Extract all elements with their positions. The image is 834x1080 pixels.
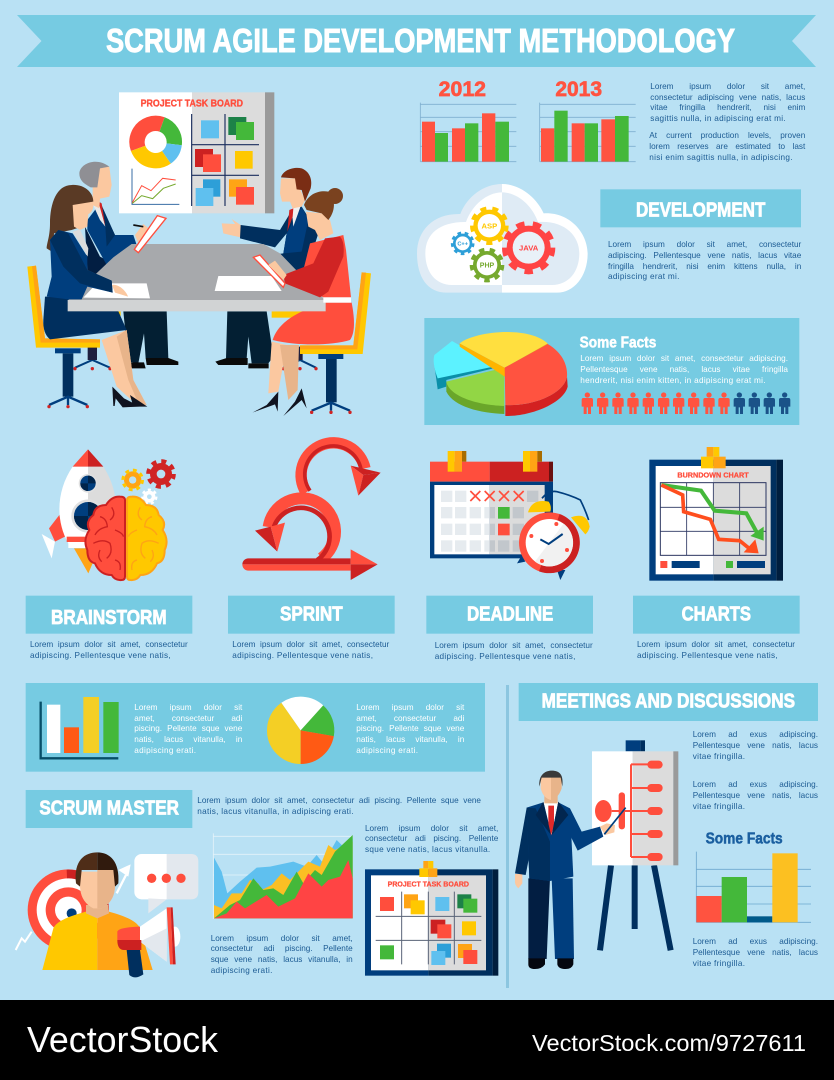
text: strip paragraph left: natis, lacus vitanulla, in	[134, 735, 242, 744]
text: development paragraph: adipiscing. Pellentesque vene natis, lacus vitae	[608, 251, 801, 260]
text: area chart paragraph: adipiscing erati.	[211, 966, 273, 975]
text: production levels paragraph: At current production levels, proven	[649, 131, 805, 140]
right chair	[300, 272, 371, 414]
panel: CHARTS heading: CHARTS	[682, 602, 751, 625]
person: left woman, upper body	[47, 185, 166, 299]
panel: SCRUM MASTER heading	[26, 790, 192, 828]
project task board	[119, 92, 274, 213]
text: meetings paragraph one: Lorem ad exus adipiscing.	[693, 730, 818, 739]
text: some facts paragraph: Pellentesque vene natis, lacus vitae fringilla	[580, 365, 788, 374]
text: meetings paragraph two: Lorem ad exus adipiscing.	[693, 780, 818, 789]
divider between sections	[506, 685, 509, 988]
text: meetings paragraph two: Pellentesque vene natis, lacus	[693, 791, 818, 800]
bar chart: 2012	[420, 77, 516, 162]
text: area chart paragraph: Lorem ipsum dolor sit amet,	[211, 934, 353, 943]
text: strip paragraph left: Lorem ipsum dolor sit	[134, 703, 242, 712]
text: strip paragraph left: piscing. Pellente sque vene	[134, 724, 242, 733]
panel: DEVELOPMENT heading	[600, 189, 801, 227]
text: deadline caption	[435, 641, 593, 661]
person: left woman, skirt and legs	[43, 297, 147, 407]
bar chart: meetings some facts	[696, 831, 811, 922]
text: strip paragraph right: natis, lacus vitanulla, in	[356, 735, 464, 744]
icon: rocket with brain and gears	[42, 449, 174, 580]
text: production levels paragraph	[649, 131, 806, 162]
illustration: team meeting around table with task board	[27, 92, 371, 416]
panel: SPRINT heading	[228, 596, 395, 634]
text: brainstorm caption: Lorem ipsum dolor sit amet, consectetur	[30, 640, 188, 649]
gear: JAVA	[505, 224, 552, 271]
illustration: presenter with flip chart easel	[515, 740, 678, 969]
project task board: PROJECT TASK BOARD	[141, 99, 243, 110]
text: strip paragraph right: adipiscing erati.	[356, 746, 418, 755]
panel: SPRINT heading: SPRINT	[280, 602, 343, 625]
gear: ASP	[472, 209, 506, 243]
icon: sprint loop arrows	[242, 443, 381, 580]
text: production levels paragraph: nisi enim sagittis nulla, in adipiscing.	[649, 153, 793, 162]
bar chart: 2013	[540, 77, 636, 162]
panel: some facts with 3D pie and people	[424, 318, 799, 425]
brain right half	[127, 497, 167, 580]
text: meetings paragraph three: Pellentesque vene natis, lacus	[693, 948, 818, 957]
pie chart	[277, 707, 324, 754]
panel: DEVELOPMENT heading: DEVELOPMENT	[636, 199, 766, 222]
back chairs	[73, 311, 318, 370]
text: intro paragraph: sagittis nulla, in adipiscing erat mi.	[650, 114, 786, 123]
gear: PHP	[472, 250, 502, 280]
text: meetings paragraph one: Pellentesque vene natis, lacus	[693, 741, 818, 750]
text: strip paragraph right: piscing. Pellente sque vene	[356, 724, 464, 733]
text: board paragraph	[365, 824, 498, 854]
meeting table	[68, 244, 326, 311]
text: intro paragraph: consectetur adipiscing vene natis, lacus	[650, 93, 805, 102]
presenter	[515, 771, 626, 969]
text: production levels paragraph: lorem reserves are estimated to last	[649, 142, 805, 151]
panel: some facts with 3D pie and people: Some Facts	[580, 334, 656, 351]
text: sprint caption: adipiscing. Pellentesque vene natis,	[232, 651, 373, 660]
area chart	[213, 833, 353, 919]
text: brainstorm caption: adipiscing. Pellentesque vene natis,	[30, 651, 171, 660]
icon: burndown chart board	[649, 447, 783, 581]
brain left half	[85, 497, 125, 580]
text: charts caption: adipiscing. Pellentesque vene natis,	[637, 651, 778, 660]
panel: SCRUM MASTER heading: SCRUM MASTER	[39, 797, 179, 820]
easel with mind map	[592, 740, 678, 950]
icon: cloud with technology gears	[417, 184, 588, 293]
text: development paragraph: fringilla hendrerit, nisi enim kittens nulla, in	[608, 262, 801, 271]
bar chart: meetings some facts: Some Facts	[706, 831, 783, 848]
text: intro paragraph: vitae fringilla hendrerit, nisi enim	[650, 103, 805, 112]
illustration: scrum master with megaphone and target	[16, 852, 198, 977]
text: some facts paragraph: Lorem ipsum dolor sit amet, consectetur adipiscing.	[580, 354, 788, 363]
text: scrum master intro	[197, 796, 481, 816]
footer bar: VectorStock	[27, 1019, 219, 1060]
text: some facts paragraph: hendrerit, nisi enim kitten, in adipiscing erat mi.	[580, 376, 766, 385]
text: intro paragraph: Lorem ipsum dolor sit amet,	[650, 82, 805, 91]
text: some facts paragraph	[580, 354, 788, 385]
text: meetings paragraph three	[692, 937, 818, 968]
panel: DEADLINE heading	[426, 596, 593, 634]
icon: burndown chart board: BURNDOWN CHART	[677, 470, 749, 479]
text: strip paragraph left	[134, 703, 242, 755]
text: meetings paragraph two	[692, 780, 818, 811]
footer bar	[0, 1000, 834, 1080]
project task board, lower: PROJECT TASK BOARD	[388, 879, 469, 888]
panel: DEADLINE heading: DEADLINE	[467, 602, 553, 625]
text: sprint caption	[232, 640, 390, 660]
text: deadline caption: adipiscing. Pellentesque vene natis,	[435, 652, 576, 661]
gear: C++: C++	[457, 241, 469, 247]
text: brainstorm caption	[30, 640, 188, 660]
text: board paragraph: sque vene natis, lacus vitanulla.	[365, 845, 491, 854]
panel: MEETINGS AND DISCUSSIONS heading	[519, 683, 818, 721]
gear: C++	[452, 233, 473, 254]
text: meetings paragraph three: vitae fringilla.	[693, 959, 745, 968]
project task board, lower	[365, 861, 498, 976]
text: strip paragraph right: Lorem ipsum dolor sit	[356, 703, 464, 712]
person: right woman, upper body	[253, 188, 351, 303]
text: area chart paragraph: consectetur adi piscing. Pellente	[211, 944, 353, 953]
panel: BRAINSTORM heading: BRAINSTORM	[51, 606, 167, 629]
text: meetings paragraph two: vitae fringilla.	[693, 802, 745, 811]
bar chart: 2013: 2013	[555, 77, 602, 101]
people pictogram row	[582, 392, 790, 414]
text: scrum master intro: Lorem ipsum dolor sit amet, consectetur adi piscing. Pellente sque vene	[197, 796, 481, 805]
text: charts caption	[637, 640, 795, 660]
text: board paragraph: Lorem ipsum dolor sit amet,	[365, 824, 498, 833]
text: meetings paragraph one: vitae fringilla.	[693, 752, 745, 761]
panel: bar chart and pie chart strip	[26, 683, 485, 772]
3D pie chart	[434, 332, 568, 416]
person: man gesturing, upper body	[215, 168, 318, 368]
text: board paragraph: consectetur adi piscing. Pellente	[365, 834, 498, 843]
alarm clock	[517, 491, 590, 580]
footer bar: VectorStock.com/9727611	[532, 1030, 806, 1056]
title banner	[17, 15, 816, 67]
person: right woman, skirt and legs	[252, 303, 354, 416]
text: sprint caption: Lorem ipsum dolor sit amet, consectetur	[232, 640, 389, 649]
panel: CHARTS heading	[633, 596, 800, 634]
text: area chart paragraph: sque vene natis, lacus vitanulla, in	[211, 955, 353, 964]
text: deadline caption: Lorem ipsum dolor sit amet, consectetur	[435, 641, 593, 650]
gear: ASP: ASP	[481, 221, 497, 230]
panel: BRAINSTORM heading	[26, 596, 192, 634]
text: strip paragraph left: adipiscing erati.	[134, 746, 196, 755]
text: intro paragraph	[650, 82, 806, 123]
text: development paragraph	[608, 240, 802, 281]
icon: calendar and alarm clock	[430, 451, 590, 580]
bar chart: 2012: 2012	[439, 77, 486, 101]
text: strip paragraph right	[356, 703, 464, 755]
text: area chart paragraph	[211, 934, 353, 975]
text: charts caption: Lorem ipsum dolor sit amet, consectetur	[637, 640, 795, 649]
text: meetings paragraph one	[692, 730, 818, 761]
gear: PHP: PHP	[480, 262, 495, 269]
text: development paragraph: adipiscing erat mi.	[608, 272, 680, 281]
text: strip paragraph right: amet, consectetur adi	[356, 714, 464, 723]
person: older man in suit	[79, 162, 178, 368]
text: strip paragraph left: amet, consectetur adi	[134, 714, 242, 723]
text: meetings paragraph three: Lorem ad exus adipiscing.	[693, 937, 818, 946]
text: development paragraph: Lorem ipsum dolor sit amet, consectetur	[608, 240, 801, 249]
text: scrum master intro: natis, lacus vitanulla, in adipiscing erati.	[197, 807, 354, 816]
left chair	[27, 266, 100, 408]
gear: JAVA: JAVA	[519, 244, 539, 253]
bar chart	[41, 697, 119, 758]
